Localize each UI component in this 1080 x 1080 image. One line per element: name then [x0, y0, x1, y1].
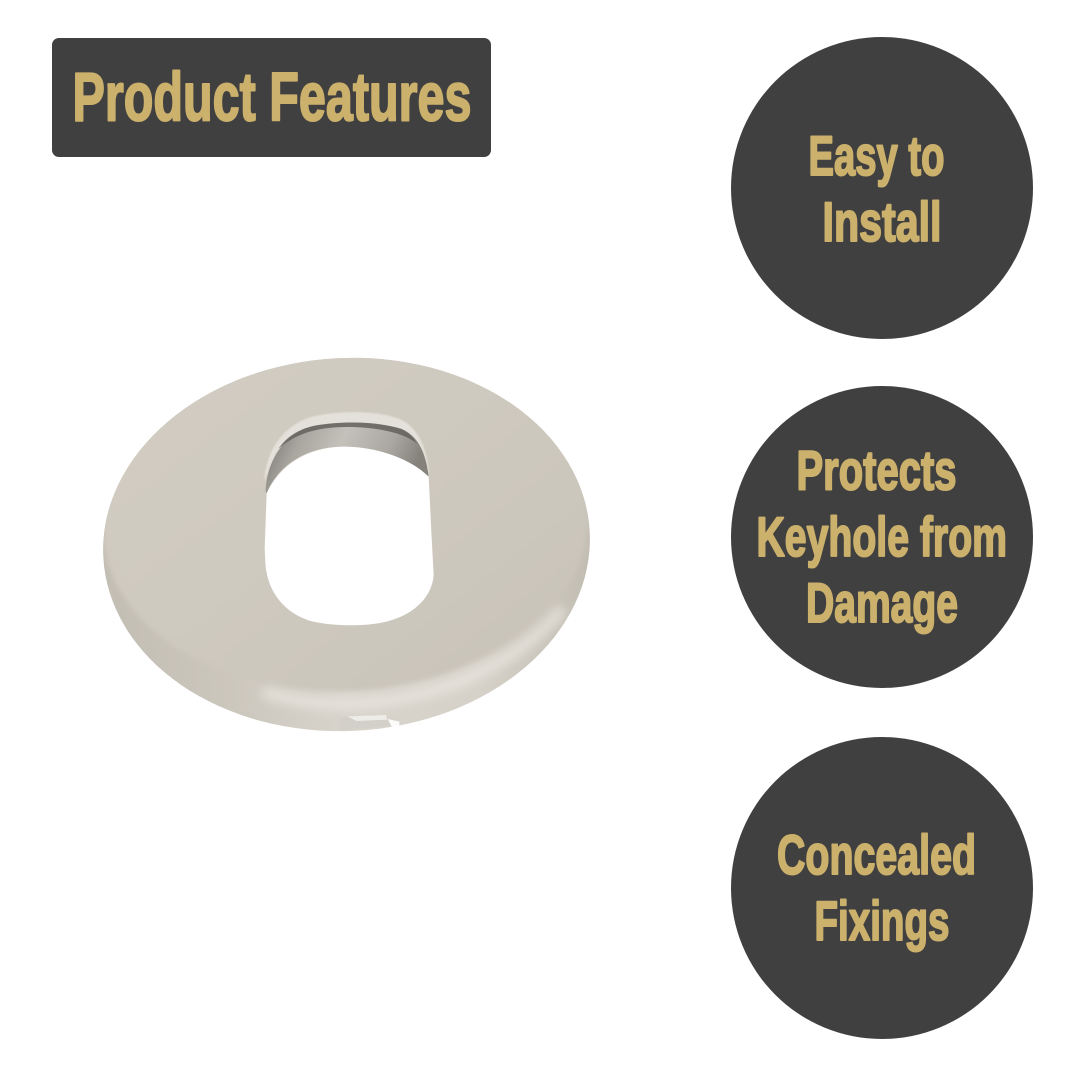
feature circle: easy to install: Easy to [808, 124, 944, 187]
disc body with bevel [94, 346, 599, 743]
feature circle: concealed fixings [731, 737, 1033, 1039]
notch [339, 715, 389, 731]
hole top rim highlight [264, 412, 429, 482]
product image: keyhole escutcheon [103, 358, 590, 732]
feature circle: easy to install [731, 37, 1033, 339]
feature circle: concealed fixings: Concealed [777, 823, 976, 886]
feature circle: easy to install: Install [822, 190, 942, 253]
title banner: Product Features [72, 58, 472, 136]
keyhole opening [265, 447, 434, 625]
title banner [52, 38, 491, 157]
bevel highlight [263, 608, 563, 704]
feature circle: protects keyhole [731, 386, 1033, 688]
feature circle: concealed fixings: Fixings [814, 889, 950, 952]
feature circle: protects keyhole: Damage [806, 571, 958, 634]
feature circle: protects keyhole: Protects [796, 438, 956, 502]
disc face [104, 358, 588, 691]
hole inner metal wall [266, 423, 429, 493]
dark metal edge [278, 423, 417, 449]
